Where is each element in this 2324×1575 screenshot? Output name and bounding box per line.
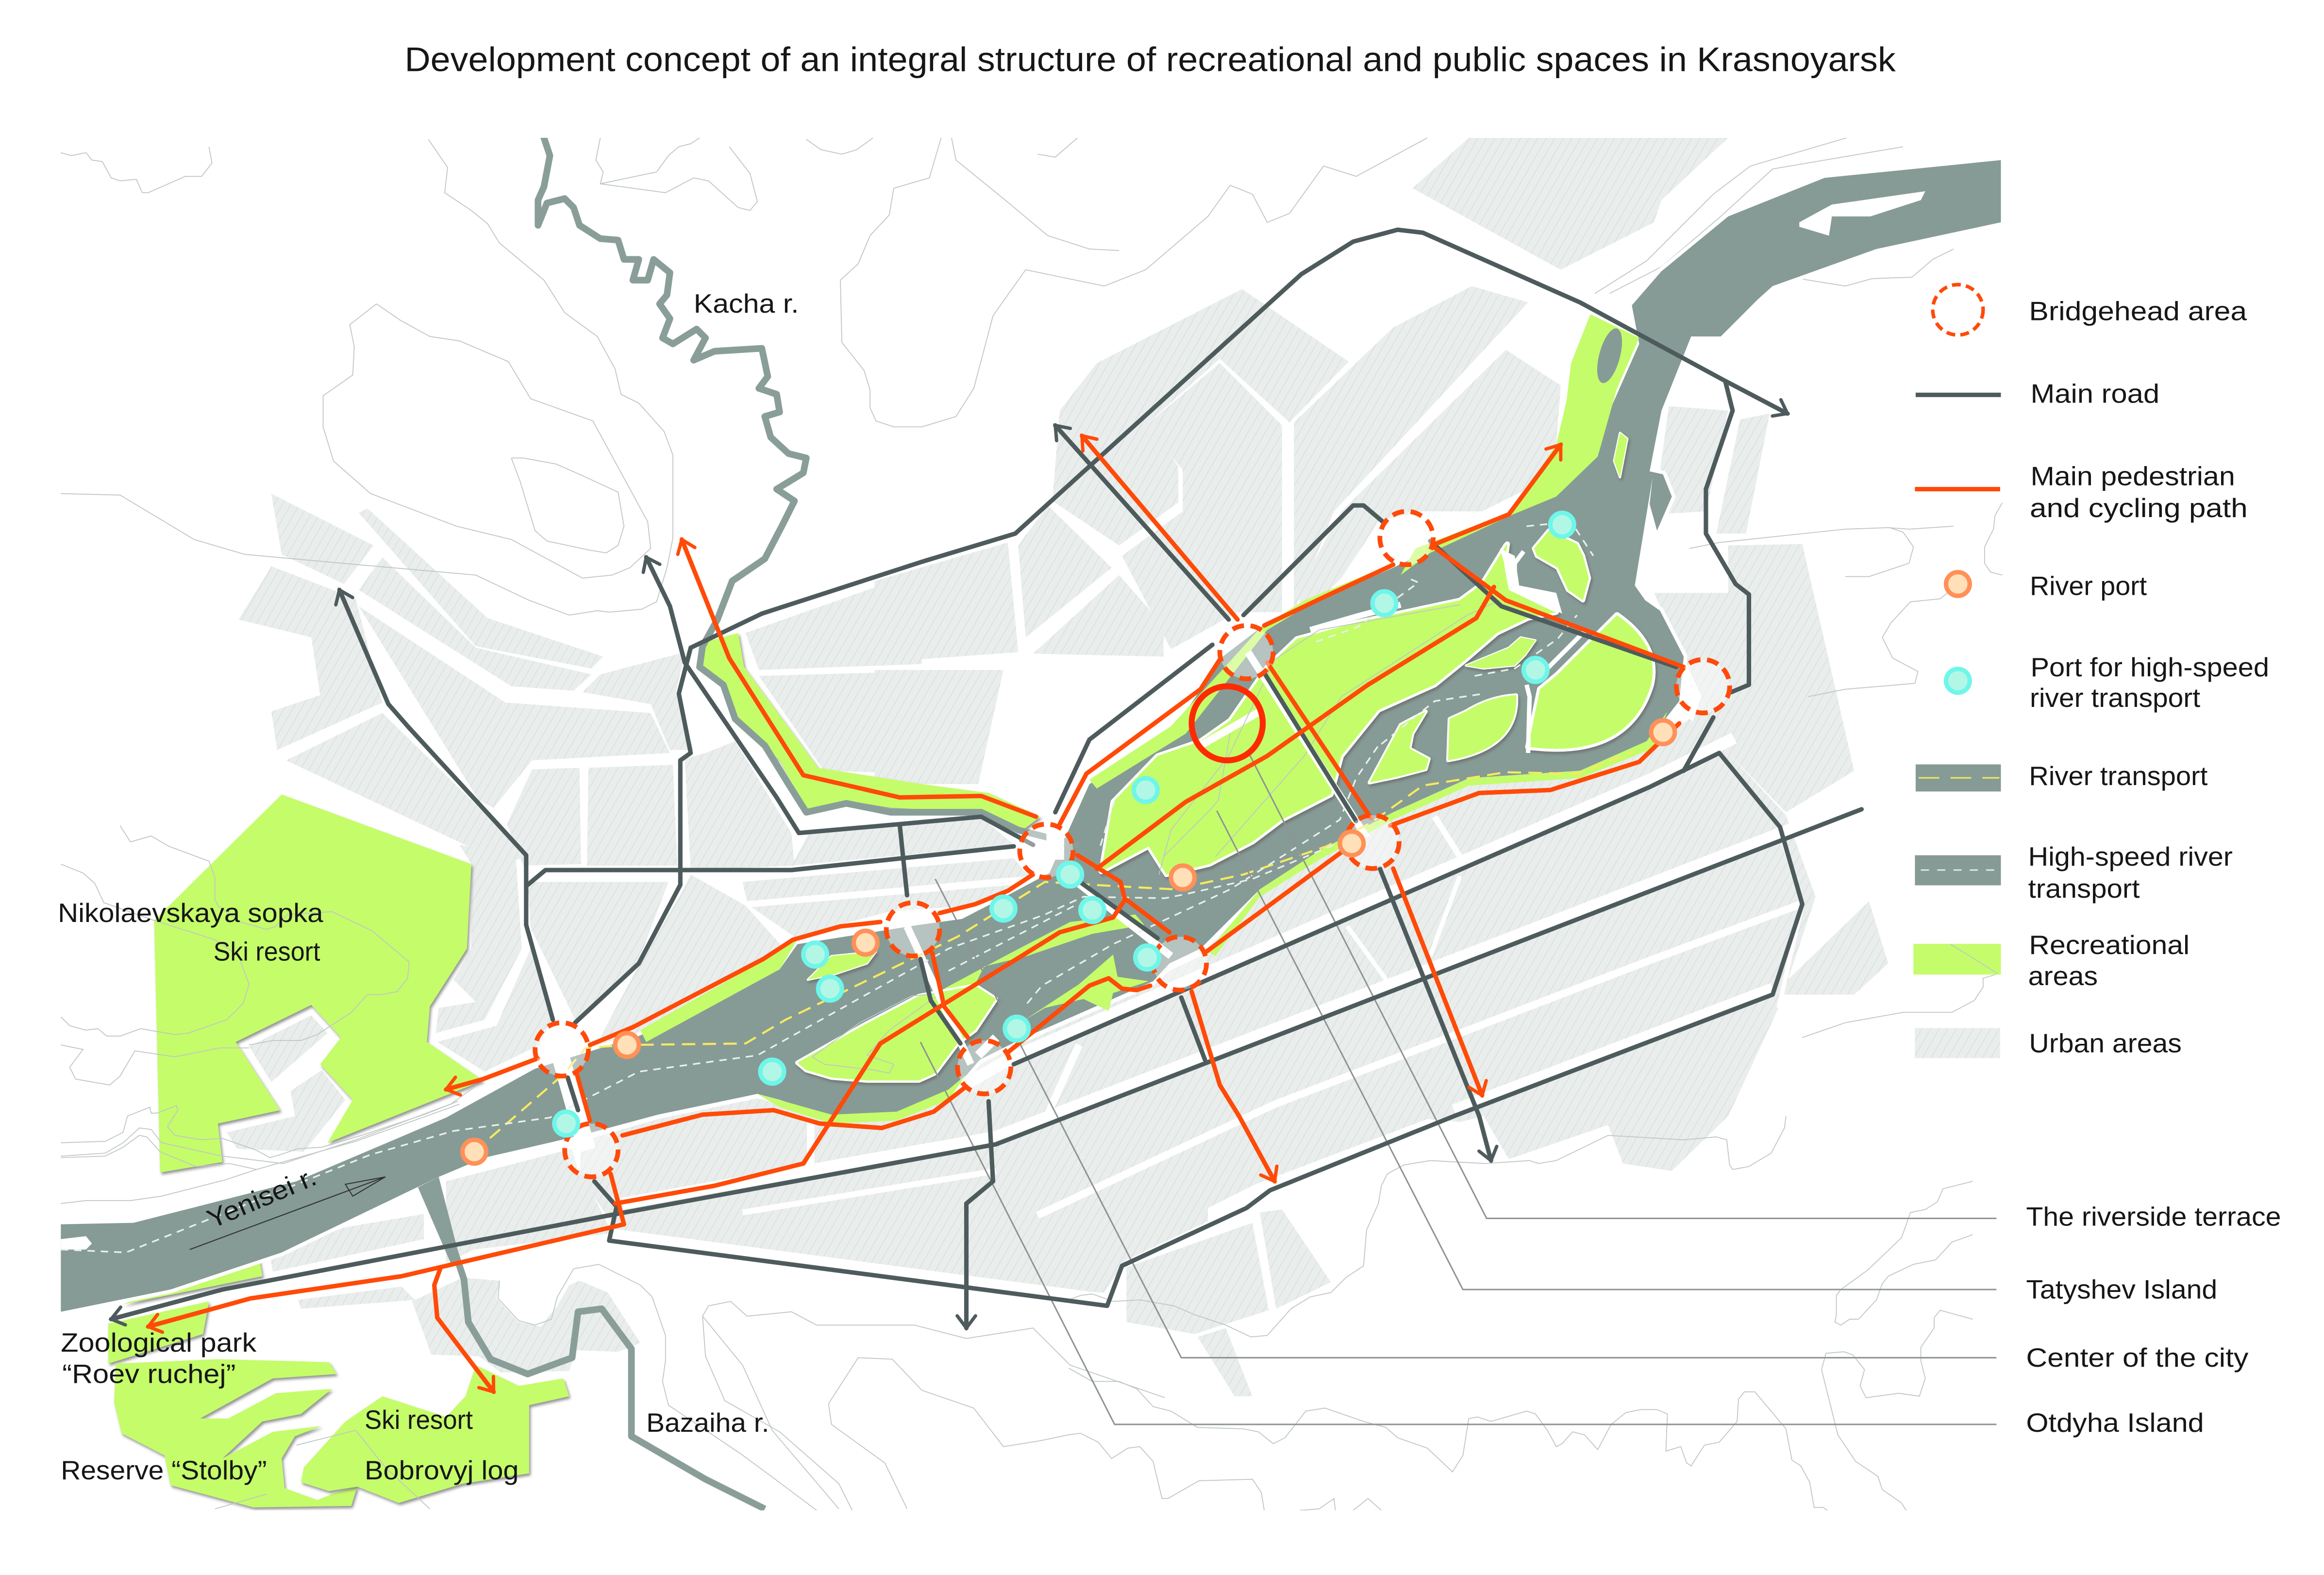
Tatyshev Island: [1101, 544, 1556, 874]
recreational area: Zoological park: [108, 1260, 262, 1364]
urban areas: [227, 138, 1888, 1396]
recreational area: Reserve Stolby: [114, 1359, 357, 1508]
main pedestrian and cycling paths: [148, 436, 1684, 1392]
small island near the centre: [808, 952, 876, 980]
legend: main road: Main road: [2030, 378, 2159, 408]
bridges: [557, 652, 1367, 1150]
eastern island 2: [1448, 695, 1516, 760]
river transport route: [474, 752, 1633, 1152]
label: Bobrovyj log: Bobrovyj log: [365, 1455, 519, 1485]
legend: urban areas: [1915, 1028, 2182, 1058]
legend: main pedestrian and cycling path: Main pedestrian: [2030, 461, 2235, 491]
label: Ski resort west: Ski resort: [214, 936, 320, 966]
label: Otdyha Island: Otdyha Island: [2026, 1407, 2204, 1438]
label: Center of the city: Center of the city: [2026, 1342, 2249, 1373]
contours on the islands: [812, 600, 1500, 1073]
legend: high-speed river transport: transport: [2028, 873, 2140, 904]
legend: [1913, 285, 2269, 1058]
river: Yenisei: [61, 160, 2001, 1312]
legend: recreational areas: areas: [2028, 961, 2098, 991]
label: Kacha: Kacha r.: [694, 288, 799, 318]
legend: river transport: [1916, 761, 2207, 791]
legend: main pedestrian and cycling path: [1915, 461, 2248, 523]
leader lines: [920, 754, 1996, 1424]
label: riverside terrace: The riverside terrace: [2026, 1202, 2281, 1232]
eastern island 5: [1534, 531, 1589, 600]
legend: port for high-speed river transport: [1946, 652, 2269, 713]
river: Bazaiha: [418, 1177, 765, 1509]
eastern island 4: [1466, 637, 1536, 669]
contour lines: [61, 138, 2002, 1510]
main roads: [111, 230, 1861, 1328]
recreational area: Nikolaevskaya sopka: [154, 794, 483, 1173]
map: [61, 138, 2002, 1510]
eastern island 1: [1528, 615, 1653, 749]
label: Zoological park: Zoological park: [61, 1327, 257, 1357]
legend: port for high-speed river transport: Port for high-speed: [2030, 652, 2269, 682]
label: Bazaiha: Bazaiha r.: [646, 1407, 769, 1438]
map labels: [58, 288, 799, 1485]
title: Development concept of an integral structure of recreational and public spaces in Krasnoyarsk: [404, 40, 1896, 79]
ports for high-speed river transport: [554, 513, 1574, 1136]
high-speed river transport routes: [61, 522, 1593, 1253]
legend: river port: [1946, 570, 2147, 601]
river island: upper sandbar: [1799, 191, 1925, 235]
islands: [797, 433, 1653, 1081]
Otdyha Island: [797, 986, 996, 1081]
flow arrow on the Yenisei: [190, 1177, 385, 1250]
recreational strips along the river banks: [640, 314, 1668, 1123]
legend: recreational areas: [1913, 930, 2190, 991]
river ports: [463, 720, 1675, 1164]
legend: port for high-speed river transport: river transport: [2030, 683, 2200, 713]
sand banks: [1201, 549, 1586, 753]
recreational area: Kacha embankment: [700, 633, 1040, 830]
legend: high-speed river transport: High-speed river: [2028, 841, 2233, 871]
label: Nikolaevskaya sopka: Nikolaevskaya sopka: [58, 898, 323, 928]
river: Kacha: [538, 138, 1077, 845]
legend: river transport: River transport: [2029, 761, 2207, 791]
legend: recreational areas: Recreational: [2029, 930, 2190, 960]
label: Tatyshev Island: Tatyshev Island: [2026, 1274, 2217, 1304]
label: Roev ruchej: “Roev ruchej”: [62, 1358, 235, 1389]
label: Ski resort south: Ski resort: [365, 1405, 473, 1435]
legend: high-speed river transport: [1915, 841, 2233, 904]
left end white notch: [61, 1236, 92, 1250]
recreational area: Bobrovyj log: [301, 1365, 569, 1503]
label: Reserve Stolby: Reserve “Stolby”: [61, 1455, 267, 1485]
city centre marker: [1192, 686, 1263, 760]
legend: river port: River port: [2030, 570, 2147, 601]
label: Yenisei: Yenisei r.: [202, 1161, 320, 1234]
eastern island 3: [1370, 711, 1429, 783]
legend: bridgehead area: Bridgehead area: [2029, 296, 2247, 326]
leader line labels: [2026, 1202, 2281, 1438]
legend: bridgehead area: [1933, 285, 2247, 335]
legend: main pedestrian and cycling path: and cycling path: [2030, 493, 2248, 523]
legend: urban areas: Urban areas: [2029, 1028, 2182, 1058]
white streets: [612, 738, 1861, 1300]
bridgehead areas: [535, 511, 1730, 1177]
eastern island 6: [1614, 433, 1627, 477]
